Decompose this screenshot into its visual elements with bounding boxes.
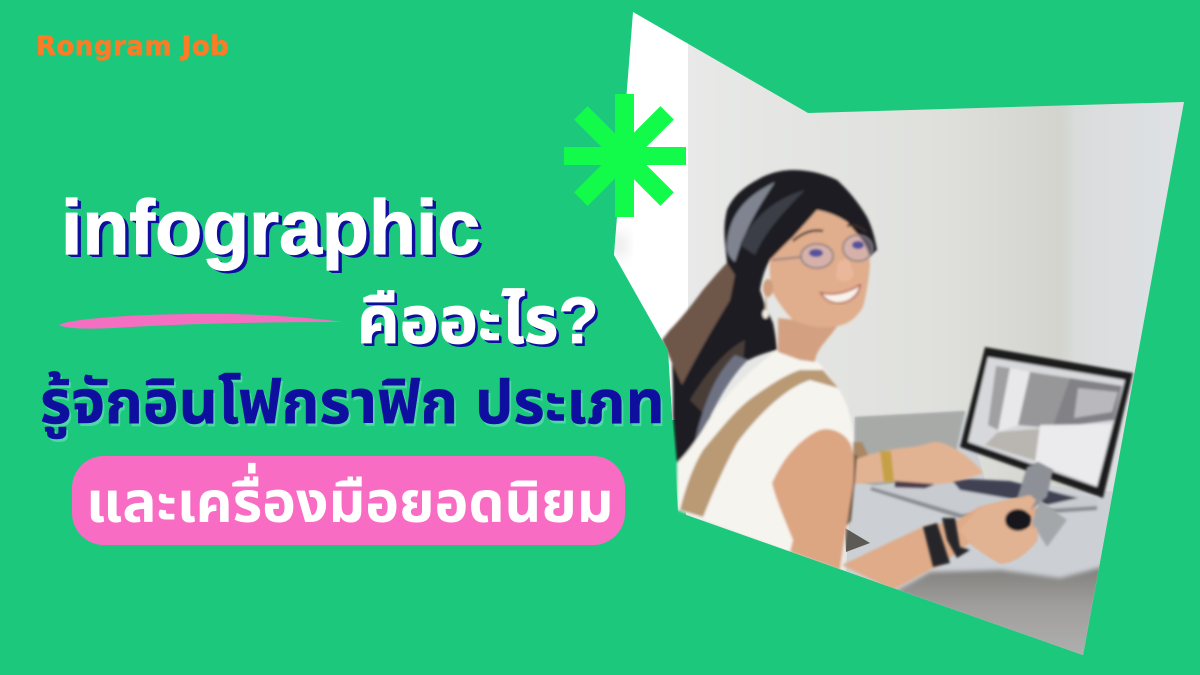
subheading: รู้จักอินโฟกราฟิก ประเภท: รู้จักอินโฟกราฟิก ประเภท [40, 368, 665, 436]
glasses [772, 235, 873, 268]
upper arm [772, 429, 854, 570]
hair highlights [727, 182, 775, 262]
camera [1015, 462, 1053, 510]
hair back and side [662, 170, 877, 463]
eyebrows [793, 230, 823, 241]
wrist straps [923, 523, 950, 567]
ear [763, 279, 773, 297]
forearm and hand on keyboard [855, 442, 983, 484]
photo: woman with laptop and camera [614, 12, 1184, 655]
shirt [677, 350, 853, 570]
lower arm [842, 495, 1037, 590]
neck [778, 318, 838, 362]
camera hand [960, 495, 1037, 563]
heading: คืออะไร?: คืออะไร? [357, 283, 599, 357]
heading: infographic: infographic [61, 185, 480, 271]
brown hair tones [662, 263, 735, 385]
bag strap [680, 370, 838, 517]
logo text: Rongram Job: Rongram Job [36, 31, 229, 62]
watch [880, 451, 894, 482]
back strap tab [853, 442, 869, 472]
pill text: และเครื่องมือยอดนิยม [86, 471, 614, 535]
laptop [870, 347, 1133, 519]
face [770, 210, 870, 327]
pink pill label [72, 456, 625, 545]
earring [762, 296, 768, 318]
nose shadow [837, 260, 853, 280]
smile [821, 285, 860, 303]
camera knob [1005, 509, 1031, 531]
table [845, 410, 1113, 655]
